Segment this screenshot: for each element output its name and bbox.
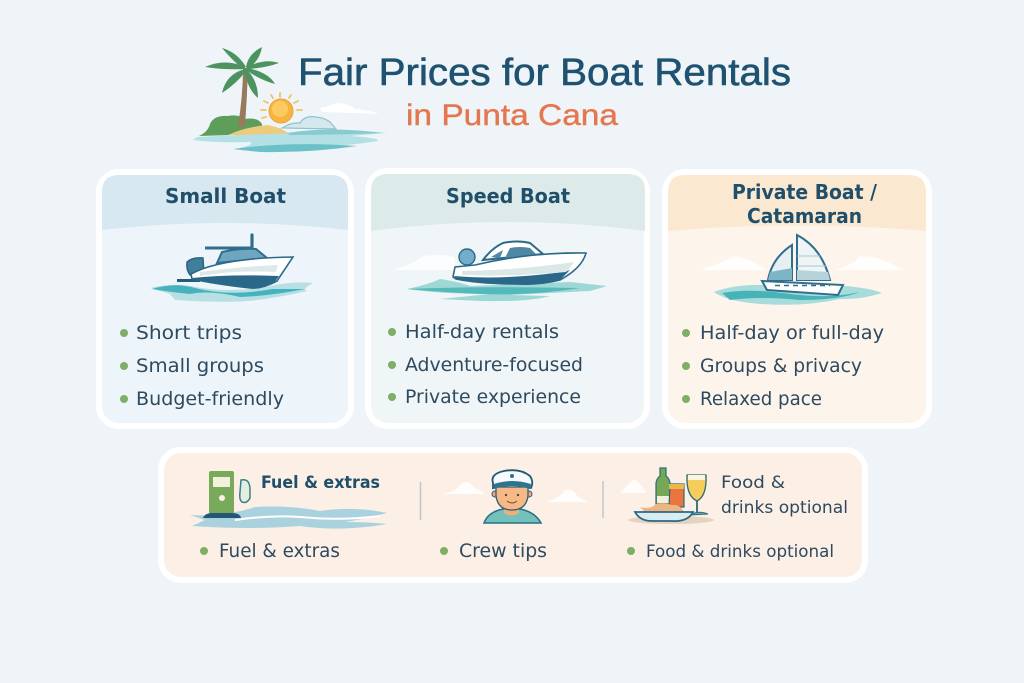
icon: food and drinks (620, 468, 714, 524)
heading: speed boat: Speed Boat (446, 184, 570, 208)
bullet list (120, 322, 284, 410)
label: fuel and extras: Fuel & extras (261, 473, 380, 493)
bullet list: Private experience (405, 386, 581, 408)
bullet list (682, 322, 884, 410)
bullet list: Relaxed pace (700, 388, 822, 410)
bullet: fuel and extras: Fuel & extras (219, 540, 340, 562)
bullet list (388, 321, 583, 408)
heading: private boat / catamaran (732, 180, 878, 228)
panel: small boat (99, 172, 351, 426)
icon: speed boat (393, 242, 607, 301)
title: Fair Prices for Boat Rentals (298, 52, 791, 94)
bullet list: Adventure-focused (405, 354, 583, 376)
panel: speed boat (368, 171, 647, 426)
label: food and drinks optional (721, 473, 848, 518)
icon: small boat (150, 235, 313, 302)
bullet list: Budget-friendly (136, 388, 284, 410)
heading: private boat / catamaran: Private Boat / (732, 180, 878, 204)
icon: catamaran (700, 235, 903, 305)
bullet: crew tips: Crew tips (459, 540, 547, 562)
bullet list: Small groups (136, 355, 264, 377)
icon: crew member (442, 470, 588, 523)
heading: small boat: Small Boat (165, 184, 286, 208)
panel: extras (161, 450, 865, 580)
heading: private boat / catamaran: Catamaran (747, 204, 862, 228)
icon: fuel pump (190, 471, 387, 529)
label: food and drinks optional: Food & (721, 473, 785, 493)
bullet list: Half-day or full-day (700, 322, 884, 344)
bullet list: Half-day rentals (405, 321, 559, 343)
subtitle: in Punta Cana (406, 99, 618, 132)
label: food and drinks optional: drinks optional (721, 498, 848, 518)
bullet list: Short trips (136, 322, 242, 344)
bullet: food and drinks optional: Food & drinks optional (646, 542, 834, 562)
bullet list: Groups & privacy (700, 355, 862, 377)
header logo: palm island with sun (193, 47, 387, 152)
panel: private boat / catamaran (665, 172, 929, 426)
